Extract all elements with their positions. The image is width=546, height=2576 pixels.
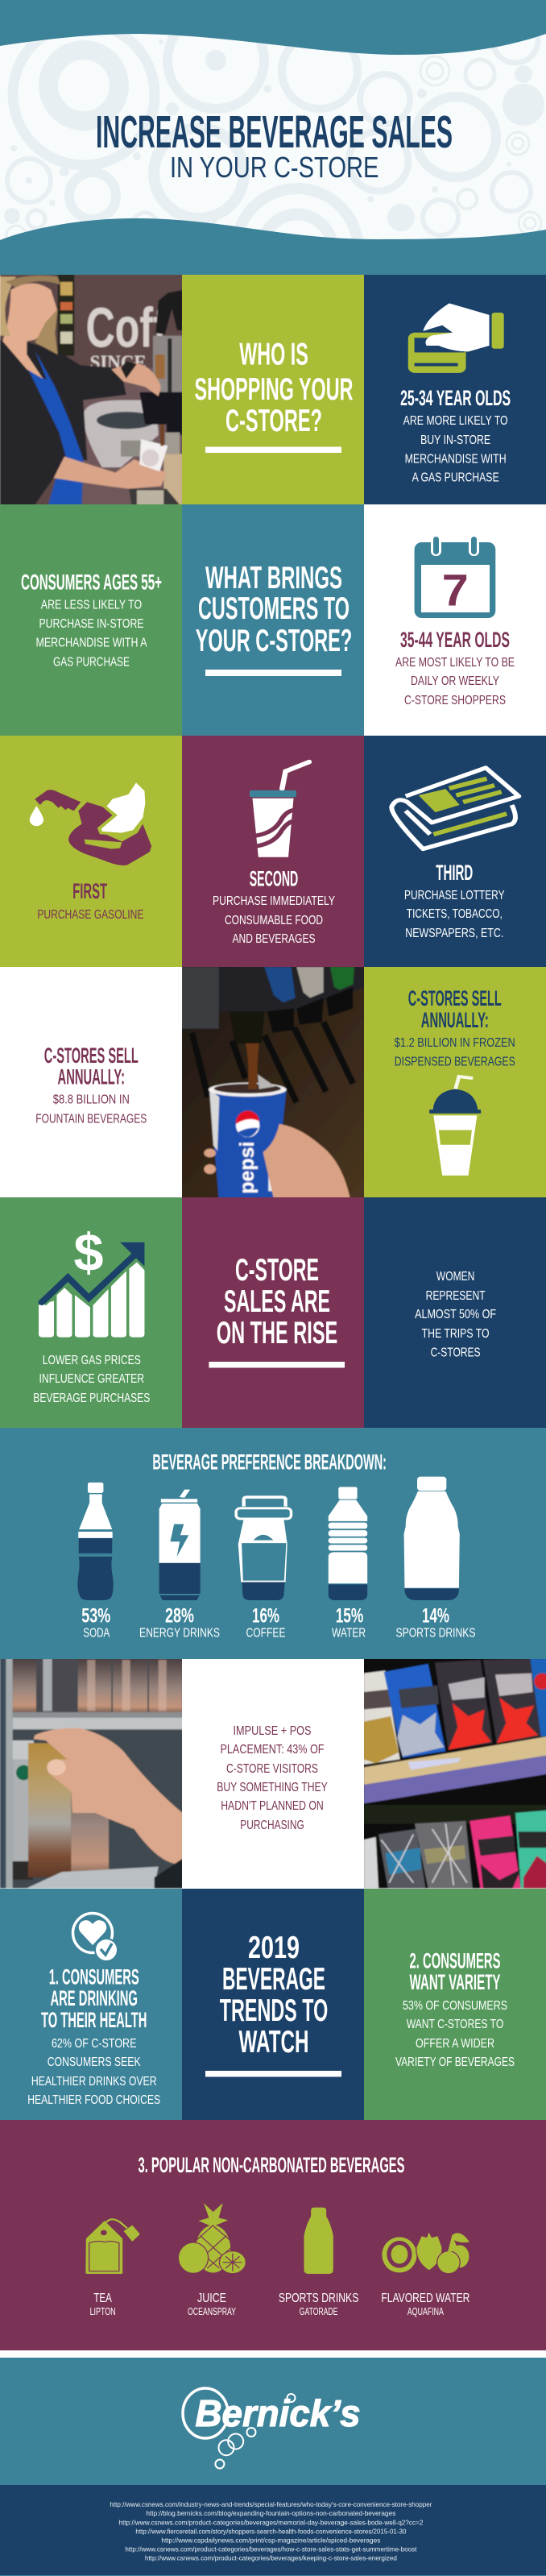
panel: frozen beverages: $1.2 BILLION IN FROZEN xyxy=(395,1036,515,1050)
panel: third lottery: THIRD xyxy=(436,861,473,885)
panel: impulse and pos placement: PURCHASING xyxy=(240,1819,304,1832)
panel: consumers ages 55+: CONSUMERS AGES 55+ xyxy=(21,570,162,595)
panel: sources xyxy=(0,2485,546,2576)
panel: consumers ages 55+: GAS PURCHASE xyxy=(53,655,130,669)
panel: women represent: THE TRIPS TO xyxy=(422,1327,490,1341)
panel: consumers want variety: WANT C-STORES TO xyxy=(407,2018,503,2031)
panel: 35-44 year olds xyxy=(364,504,546,736)
panel: lower gas prices xyxy=(0,1197,182,1428)
panel: second consumables: SECOND xyxy=(250,867,298,891)
label: tea: LIPTON xyxy=(90,2305,116,2317)
panel: sales on the rise xyxy=(182,1197,364,1428)
panel: fountain beverages xyxy=(0,967,182,1197)
panel: 25-34 year olds: A GAS PURCHASE xyxy=(412,471,499,484)
panel: consumers ages 55+: MERCHANDISE WITH A xyxy=(35,636,147,649)
icon: energy drink can xyxy=(159,1490,201,1600)
stat: water: WATER xyxy=(332,1626,366,1640)
panel: 2019 beverage trends: BEVERAGE xyxy=(222,1962,325,1997)
panel: women represent xyxy=(364,1197,546,1428)
panel: 2019 beverage trends: 2019 xyxy=(248,1931,300,1965)
label: tea: TEA xyxy=(93,2292,112,2305)
icon: calendar: 7 xyxy=(442,564,469,616)
panel: second consumables: PURCHASE IMMEDIATELY xyxy=(213,894,335,908)
icon: frozen drink cup xyxy=(429,1076,481,1176)
panel: fountain beverages: FOUNTAIN BEVERAGES xyxy=(35,1112,147,1126)
panel: impulse and pos placement: PLACEMENT: 43% OF xyxy=(221,1743,325,1757)
panel: impulse and pos placement: C-STORE VISITORS xyxy=(226,1762,318,1776)
photo: pepsi cup at fountain: pepsi xyxy=(236,1142,259,1194)
panel: third lottery: TICKETS, TOBACCO, xyxy=(407,907,503,921)
panel: impulse and pos placement: BUY SOMETHING THEY xyxy=(217,1781,328,1794)
panel: fountain beverages: $8.8 BILLION IN xyxy=(53,1093,130,1107)
panel: sources: http://blog.bernicks.com/blog/expanding-fountain-options-non-carbonated-beverages xyxy=(146,2509,395,2517)
stat: sports drinks xyxy=(396,1605,475,1640)
icon: newspaper xyxy=(391,768,519,849)
icon: heart with check xyxy=(72,1913,118,1962)
panel: sales on the rise: ON THE RISE xyxy=(217,1316,337,1350)
panel: 25-34 year olds xyxy=(364,275,546,504)
panel: sources: http://www.csnews.com/product-categories/beverages/memorial-day-beverage-sales-bode-well-q2?cc=2 xyxy=(118,2518,424,2526)
panel: impulse and pos placement: HADN'T PLANNED ON xyxy=(221,1799,324,1813)
logo: Bernick's xyxy=(183,2388,361,2469)
stat: energy drinks: ENERGY DRINKS xyxy=(139,1626,220,1640)
icon: sports drink bottle xyxy=(404,1477,460,1600)
stat: coffee: COFFEE xyxy=(246,1626,285,1640)
photo: pepsi cup at fountain xyxy=(181,965,366,1199)
stat: soda: SODA xyxy=(83,1626,110,1640)
panel: second consumables: CONSUMABLE FOOD xyxy=(225,914,323,927)
panel: frozen beverages xyxy=(364,967,546,1197)
photo: hand taking can from cooler xyxy=(0,1657,185,1888)
label: juice: OCEANSPRAY xyxy=(188,2305,236,2317)
panel: women represent: ALMOST 50% OF xyxy=(415,1308,496,1321)
panel: sales on the rise: SALES ARE xyxy=(224,1284,330,1319)
panel: 25-34 year olds: ARE MORE LIKELY TO xyxy=(403,414,508,428)
panel: sources: http://www.cspdailynews.com/print/csp-magazine/article/spiced-beverages xyxy=(161,2536,380,2544)
icon: soft drink cup xyxy=(250,762,309,857)
stat: soda xyxy=(81,1605,110,1640)
panel: impulse and pos placement: IMPULSE + POS xyxy=(234,1724,311,1738)
stat: water xyxy=(332,1605,366,1640)
panel: drinking to their health xyxy=(0,1889,182,2120)
panel: consumers want variety: 53% OF CONSUMERS xyxy=(403,1999,507,2013)
panel: what brings customers: YOUR C-STORE? xyxy=(196,624,352,658)
panel: drinking to their health: 62% OF C-STORE xyxy=(52,2037,136,2051)
panel: drinking to their health: ARE DRINKING xyxy=(50,1986,138,2010)
icon: flavored water fruit xyxy=(382,2231,469,2274)
panel: first gasoline: PURCHASE GASOLINE xyxy=(37,908,143,922)
panel: first gasoline xyxy=(0,736,182,967)
panel: who is shopping: C-STORE? xyxy=(225,404,322,438)
stat: coffee xyxy=(246,1605,285,1640)
stat: energy drinks xyxy=(139,1605,220,1640)
panel: second consumables xyxy=(182,736,364,967)
panel: drinking to their health: CONSUMERS SEEK xyxy=(48,2055,141,2069)
panel: fountain beverages: ANNUALLY: xyxy=(58,1065,125,1089)
panel: logo band xyxy=(0,2358,546,2485)
panel: what brings customers: WHAT BRINGS xyxy=(205,561,342,595)
panel: second consumables: AND BEVERAGES xyxy=(232,932,316,946)
panel: 2019 beverage trends xyxy=(182,1889,364,2120)
panel: who is shopping: WHO IS xyxy=(239,338,308,372)
label: sports drinks xyxy=(279,2292,358,2317)
panel: lower gas prices: LOWER GAS PRICES xyxy=(43,1354,141,1367)
icon: hand holding card xyxy=(408,303,504,373)
title xyxy=(96,107,453,184)
panel: third lottery: PURCHASE LOTTERY xyxy=(404,889,505,902)
icon: calendar xyxy=(415,535,495,618)
stat: energy drinks: 28% xyxy=(165,1605,194,1628)
panel: drinking to their health: TO THEIR HEALTH xyxy=(41,2008,147,2032)
logo: Bernick's: Bernick’s xyxy=(195,2392,361,2434)
label: juice: JUICE xyxy=(197,2292,226,2305)
header panel xyxy=(0,0,546,311)
stat: sports drinks: SPORTS DRINKS xyxy=(396,1626,475,1640)
panel: 35-44 year olds: ARE MOST LIKELY TO BE xyxy=(395,656,515,670)
panel: drinking to their health: HEALTHIER DRINKS OVER xyxy=(31,2075,157,2089)
label: tea xyxy=(90,2292,116,2317)
panel: first gasoline: FIRST xyxy=(72,879,107,903)
label: flavored water: FLAVORED WATER xyxy=(381,2292,469,2305)
panel: drinking to their health: HEALTHIER FOOD CHOICES xyxy=(27,2093,160,2107)
label: sports drinks: SPORTS DRINKS xyxy=(279,2292,358,2305)
panel: sources: http://www.csnews.com/product-categories/beverages/keeping-c-store-sales-energized xyxy=(145,2553,397,2561)
stat: water: 15% xyxy=(336,1605,363,1628)
panel: lower gas prices: BEVERAGE PURCHASES xyxy=(33,1392,150,1405)
icon: water bottle xyxy=(329,1487,367,1600)
panel: who is shopping xyxy=(182,275,364,504)
panel: beverage preference breakdown xyxy=(0,1428,546,1659)
label: flavored water xyxy=(381,2292,469,2317)
panel: consumers ages 55+: PURCHASE IN-STORE xyxy=(39,617,143,631)
photo: woman pouring coffee: Coff xyxy=(86,297,167,359)
stat: sports drinks: 14% xyxy=(422,1605,449,1628)
stat: coffee: 16% xyxy=(252,1605,279,1628)
label: sports drinks: GATORADE xyxy=(300,2305,338,2317)
panel: popular non-carbonated beverages xyxy=(0,2120,546,2350)
panel: frozen beverages: ANNUALLY: xyxy=(421,1008,489,1032)
icon: rising sales chart xyxy=(39,1222,144,1338)
panel: consumers ages 55+ xyxy=(0,504,182,736)
panel: 2019 beverage trends: WATCH xyxy=(238,2025,309,2060)
panel: women represent: WOMEN xyxy=(436,1270,474,1284)
icon: coffee cup xyxy=(236,1497,291,1600)
panel: sales on the rise: C-STORE xyxy=(235,1253,319,1288)
panel: 25-34 year olds: MERCHANDISE WITH xyxy=(405,453,507,466)
panel: impulse and pos placement xyxy=(182,1659,364,1889)
photo: woman pouring coffee xyxy=(0,274,185,508)
panel: what brings customers: CUSTOMERS TO xyxy=(198,591,350,626)
panel: what brings customers xyxy=(182,504,364,736)
panel: third lottery: NEWSPAPERS, ETC. xyxy=(405,927,503,940)
panel: lower gas prices: INFLUENCE GREATER xyxy=(39,1372,144,1386)
icon: soda bottle xyxy=(77,1483,114,1600)
label: flavored water: AQUAFINA xyxy=(407,2305,444,2317)
panel: 35-44 year olds: C-STORE SHOPPERS xyxy=(404,694,506,707)
icon: fuel nozzle xyxy=(30,780,151,865)
panel: 35-44 year olds: DAILY OR WEEKLY xyxy=(411,674,499,688)
photo: woman pouring coffee: SINCE xyxy=(90,352,147,373)
panel: consumers ages 55+: ARE LESS LIKELY TO xyxy=(41,598,142,612)
panel: 2019 beverage trends: TRENDS TO xyxy=(220,1993,328,2028)
label: juice xyxy=(188,2292,236,2317)
panel: third lottery xyxy=(364,736,546,967)
panel: sources: http://www.csnews.com/industry-news-and-trends/special-features/who-today's-core-convenience-store-shopper xyxy=(110,2500,432,2508)
icon: rising sales chart: $ xyxy=(74,1222,103,1282)
panel: consumers want variety: OFFER A WIDER xyxy=(416,2037,494,2051)
panel: drinking to their health: 1. CONSUMERS xyxy=(49,1965,139,1989)
panel: women represent: C-STORES xyxy=(431,1346,481,1360)
panel: sources: http://www.csnews.com/product-categories/beverages/how-c-store-sales-stats-get-summertime-boost xyxy=(125,2545,417,2553)
panel: 25-34 year olds: BUY IN-STORE xyxy=(420,433,490,447)
stat: soda: 53% xyxy=(81,1605,110,1628)
title: IN YOUR C-STORE xyxy=(170,151,378,184)
panel: consumers want variety xyxy=(364,1889,546,2120)
panel: who is shopping: SHOPPING YOUR xyxy=(195,372,354,407)
panel: women represent: REPRESENT xyxy=(426,1289,486,1303)
panel: fountain beverages: C-STORES SELL xyxy=(44,1043,139,1068)
panel: sources: http://www.fierceretail.com/story/shoppers-search-health-foods-convenience-stores/2015-01-30 xyxy=(135,2527,407,2535)
photo: energy drink shelves xyxy=(362,1657,546,1888)
icon: juice fruit xyxy=(178,2203,246,2274)
icon: tea bag xyxy=(85,2219,140,2274)
icon: sports drink bottle small xyxy=(304,2208,333,2274)
